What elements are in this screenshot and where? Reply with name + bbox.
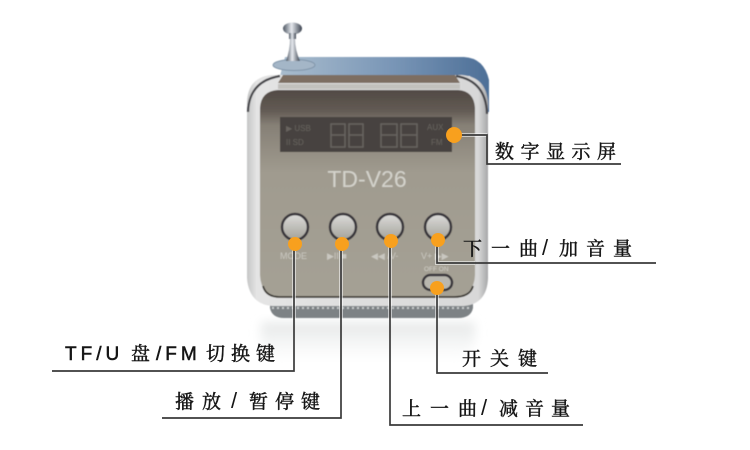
callout: mode: 盘 [131, 343, 150, 365]
callout: previous / volume down: 减音量 [499, 398, 577, 420]
callout: mode: 切换键 [206, 343, 281, 365]
button legends: OFF ON [424, 266, 449, 273]
model name: TD-V26 [327, 166, 407, 192]
callout: next / volume up: 加音量 [559, 238, 640, 260]
front panel [260, 90, 475, 297]
panel bottom edge [263, 286, 473, 297]
button: mode [282, 214, 308, 240]
antenna [273, 22, 315, 70]
seven-segment digits [331, 124, 417, 147]
LCD display: II SD [286, 138, 304, 147]
callout: previous / volume down [384, 234, 583, 425]
callout: power switch: 开关键 [462, 348, 546, 370]
LCD display: ▶ USB [286, 124, 311, 133]
callout: play / pause: / [231, 388, 238, 413]
callout: previous / volume down: 上一曲 [402, 398, 486, 420]
button: next [425, 214, 451, 240]
power switch [423, 275, 452, 290]
button legends: ▶II ■ [327, 251, 347, 261]
callout: mode: /FM [156, 344, 201, 365]
callout: power switch [430, 281, 548, 373]
callout: digital display [446, 127, 623, 164]
callout: mode [52, 237, 302, 371]
callout: play / pause: 播放 [175, 391, 229, 413]
button legends: V+ ▶▶ [421, 251, 449, 261]
chrome bezel [247, 75, 488, 306]
button legends: MODE [280, 251, 307, 261]
blue top of case [280, 57, 489, 112]
device reflection [260, 322, 476, 360]
LCD display [280, 117, 452, 152]
button legends: ◀◀ /V- [371, 251, 398, 261]
callout: next / volume up: 下一曲 [463, 238, 547, 260]
LCD display: AUX [427, 123, 444, 132]
callout: play / pause: 暂停键 [249, 391, 327, 413]
callout: next / volume up: / [542, 235, 549, 260]
button: play [330, 214, 356, 240]
callout: next / volume up [431, 233, 656, 263]
button legends [280, 251, 449, 273]
callout: digital display: 数字显示屏 [495, 141, 623, 163]
callout: play / pause [162, 237, 349, 418]
LCD display: FM [431, 138, 443, 147]
button: previous [377, 214, 403, 240]
base edge [270, 300, 473, 318]
speaker device [247, 22, 489, 318]
callout: mode: TF/U [65, 344, 123, 365]
top lip shadow [278, 75, 460, 83]
bezel dark corner highlights [248, 76, 280, 112]
callout: previous / volume down: / [481, 395, 488, 420]
